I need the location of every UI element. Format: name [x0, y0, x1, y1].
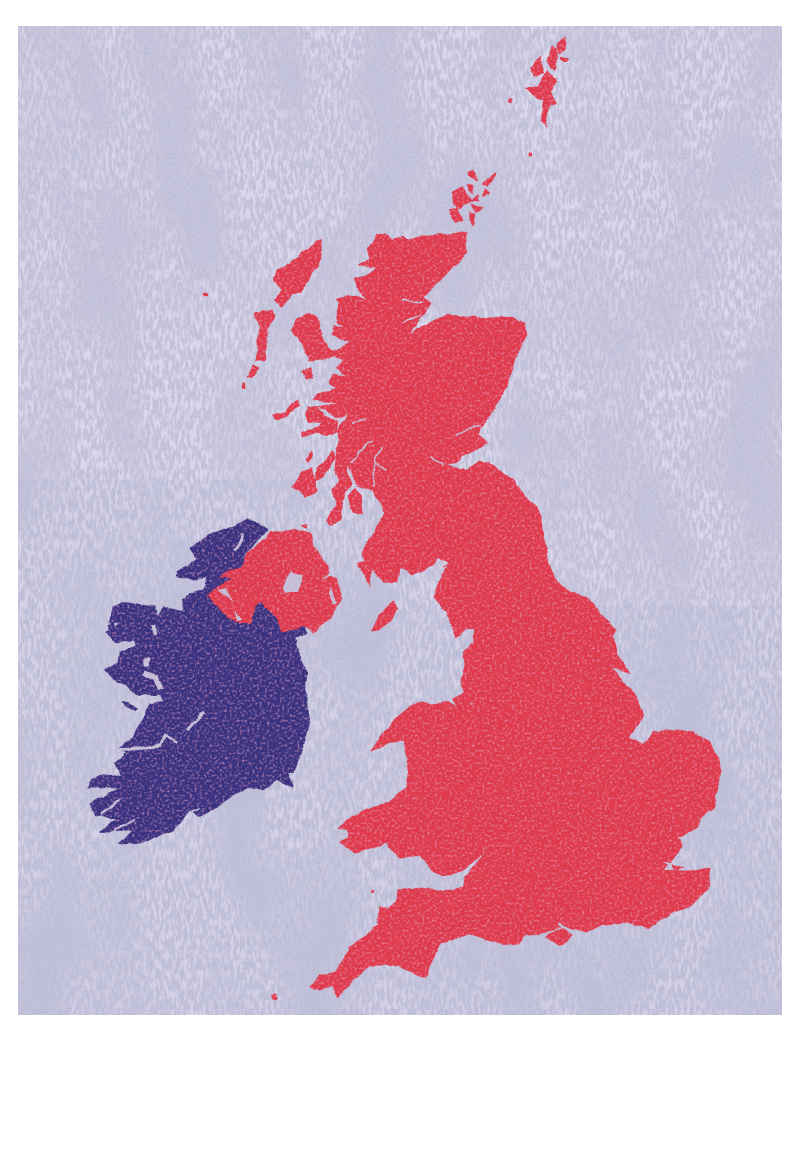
Isle of Man [373, 602, 397, 630]
region: Great Britain and Northern Ireland [204, 38, 721, 1000]
Isle of Wight [545, 928, 572, 945]
Orkney [450, 170, 495, 225]
Northern Ireland [207, 530, 342, 632]
map: British Isles [88, 38, 721, 1000]
Great Britain mainland [310, 233, 721, 997]
Hebrides and western isles [204, 240, 362, 528]
lakes and sea lochs [218, 300, 480, 620]
region: Republic of Ireland [88, 518, 310, 844]
small southern islands [272, 865, 682, 1000]
Shetland [509, 38, 567, 156]
